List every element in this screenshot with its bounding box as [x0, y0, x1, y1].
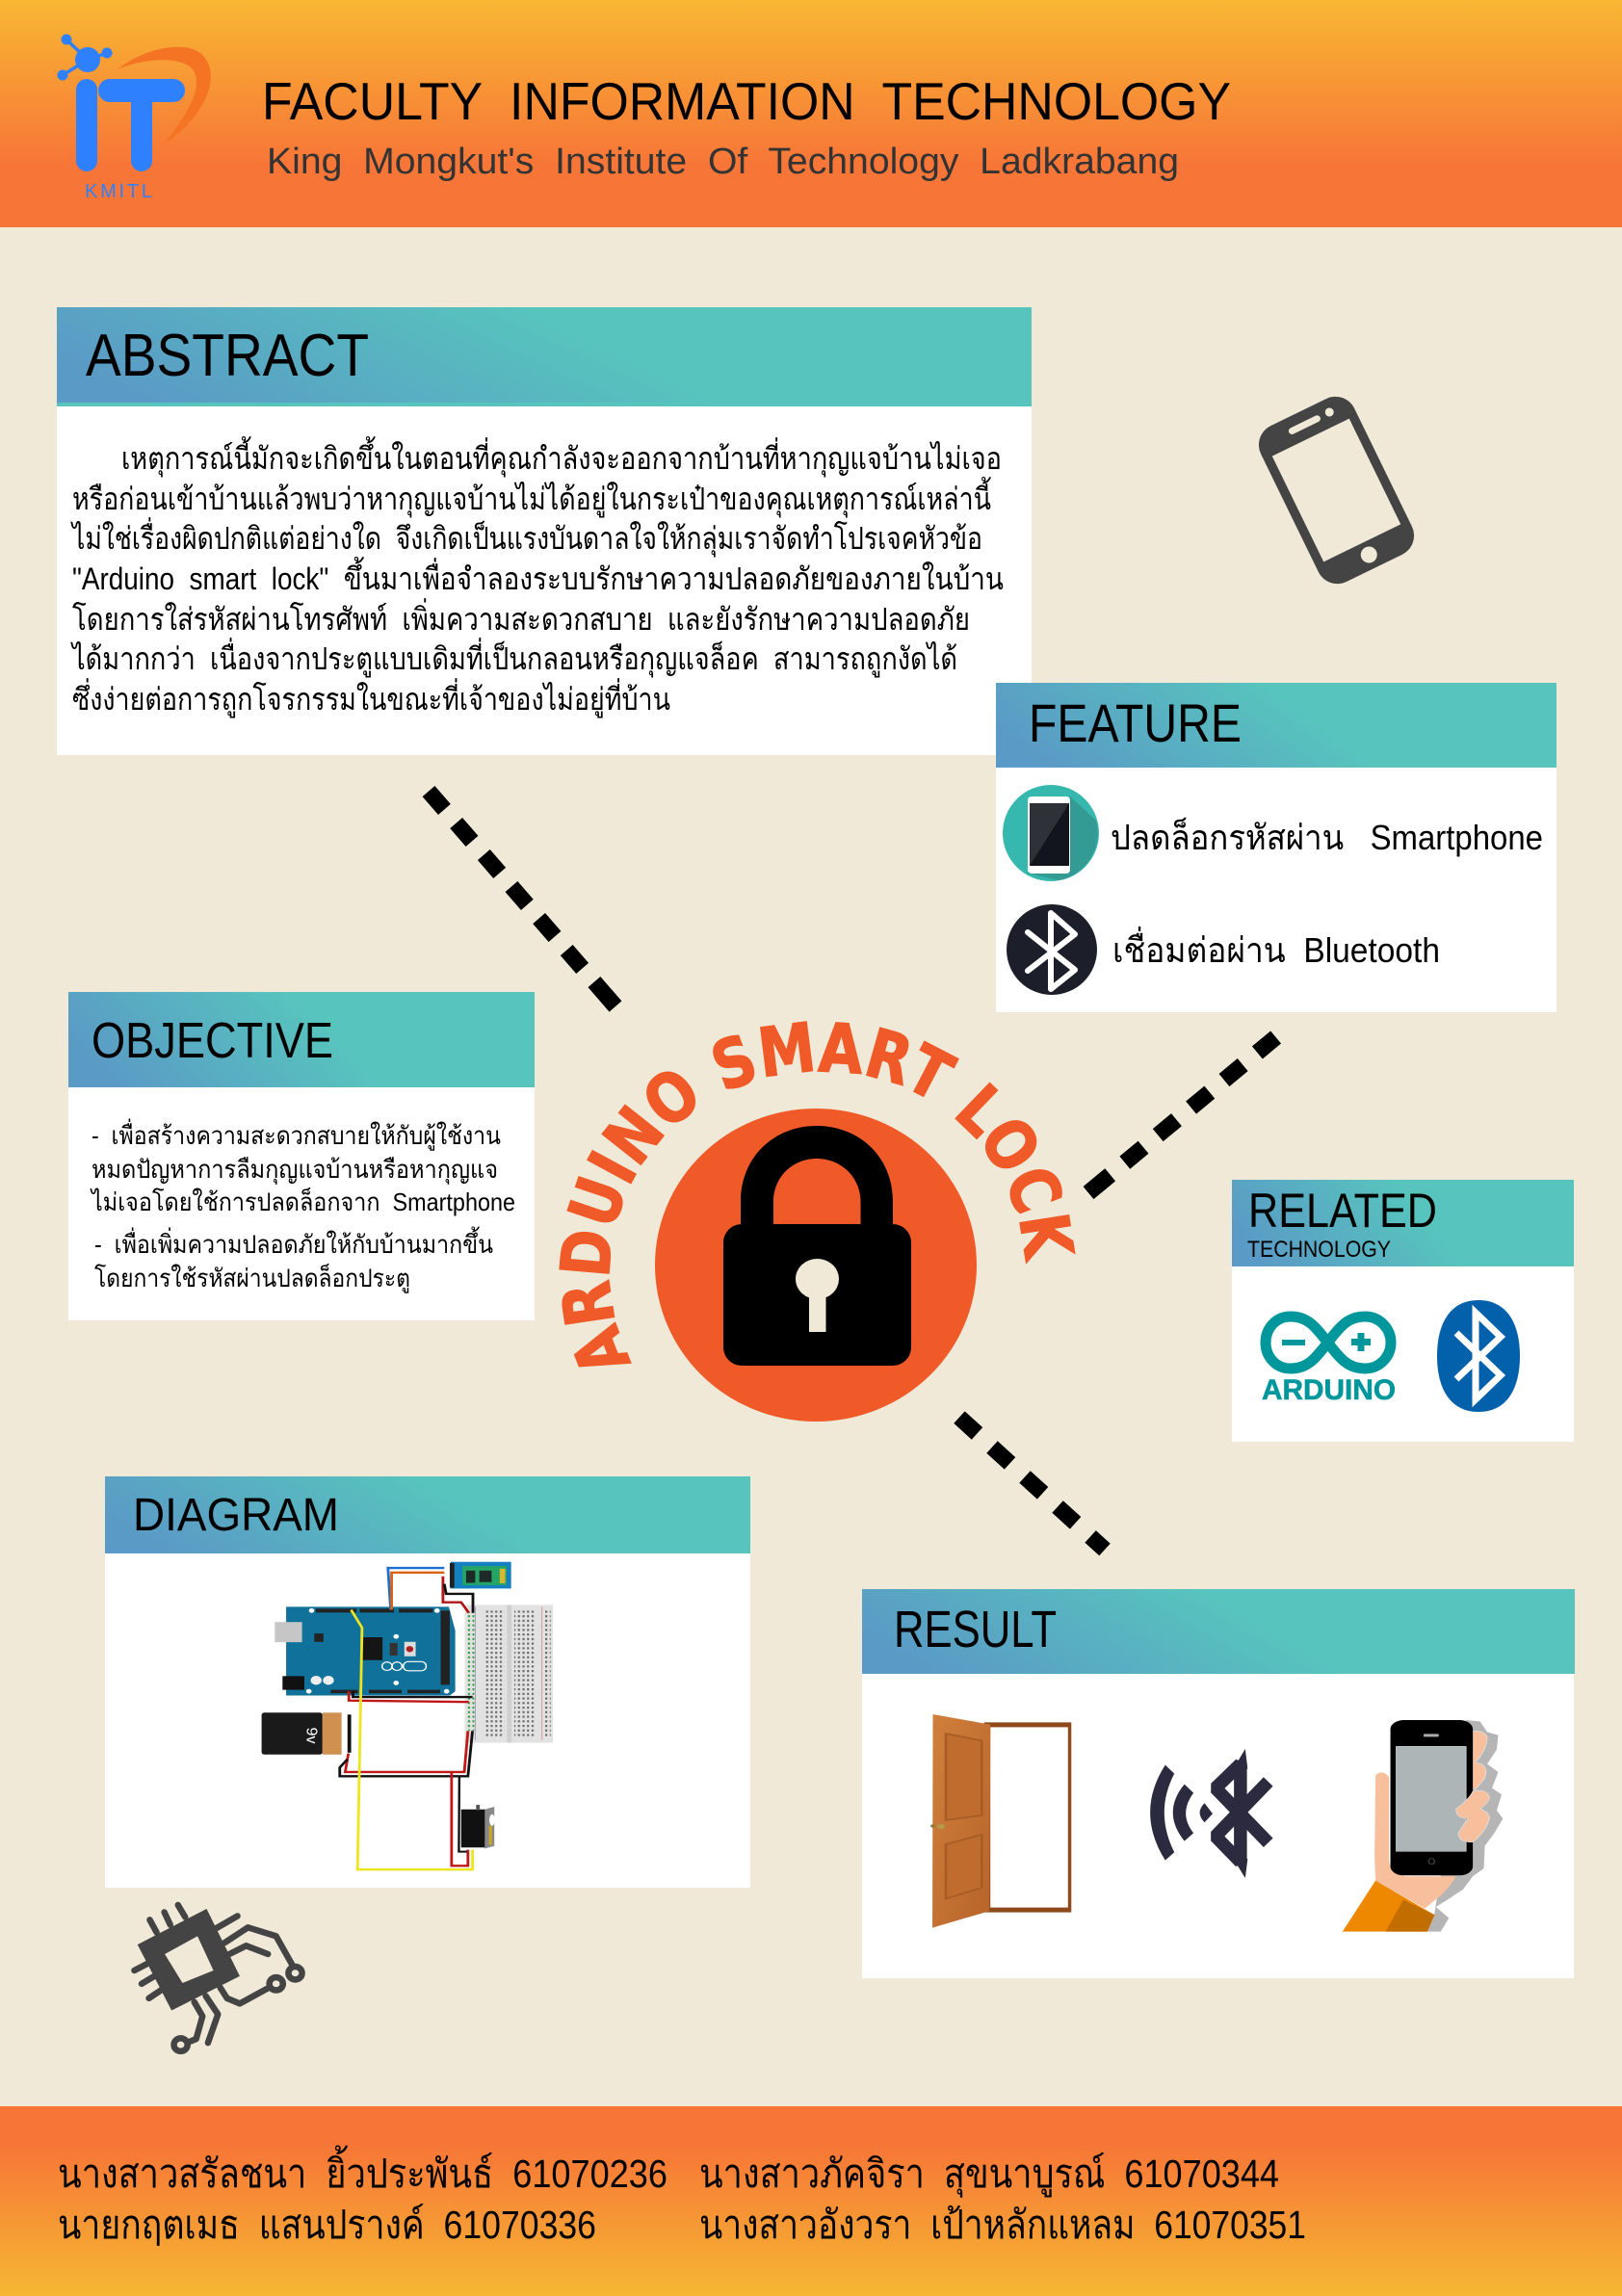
- heading: related: RELATED: [1248, 1184, 1437, 1238]
- objective text: โดยการใช้รหัสผ่านปลดล็อกประตู: [94, 1263, 410, 1293]
- heading: diagram: DIAGRAM: [133, 1490, 339, 1541]
- dashed connector: to feature: [1088, 1037, 1276, 1193]
- heading: result: RESULT: [894, 1601, 1057, 1658]
- student names: นายกฤตเมธ แสนปรางค์ 61070336: [58, 2203, 596, 2247]
- icon: arduino logo: [1262, 1317, 1396, 1406]
- student names: [58, 2145, 1306, 2247]
- logo: IT KMITL: [58, 35, 211, 202]
- subheading: technology: TECHNOLOGY: [1247, 1237, 1391, 1263]
- dashed connector: to abstract: [429, 792, 615, 1006]
- objective text: หมดปัญหาการลืมกุญแจบ้านหรือหากุญแจ: [92, 1155, 498, 1185]
- icon: padlock: [723, 1126, 911, 1366]
- objective text: - เพื่อสร้างความสะดวกสบายให้กับผู้ใช้งาน: [92, 1118, 501, 1151]
- panel: feature: [996, 683, 1557, 1012]
- arduino mega board: [275, 1606, 456, 1696]
- abstract text: "Arduino smart lock" ขึ้นมาเพื่อจำลองระบบรักษาความปลอดภัยของภายในบ้าน: [72, 557, 1004, 596]
- circle: [655, 1109, 977, 1422]
- abstract text: หรือก่อนเข้าบ้านแล้วพบว่าหากุญแจบ้านไม่ได้อยู่ในกระเป๋าของคุณเหตุการณ์เหล่านี้: [72, 477, 992, 518]
- title: FACULTY INFORMATION TECHNOLOGY: [262, 71, 1231, 131]
- header band: [0, 0, 1622, 227]
- curved title: ARDUINO SMART LOCK: [559, 1021, 1076, 1368]
- student names: นางสาวสรัลชนา ยิ้วประพันธ์ 61070236: [58, 2145, 667, 2196]
- breadboard: [465, 1605, 553, 1743]
- heading: objective: OBJECTIVE: [92, 1013, 333, 1069]
- wires: [340, 1568, 473, 1869]
- central emblem: arduino smart lock: [559, 1021, 1076, 1422]
- objective text: - เพื่อเพิ่มความปลอดภัยให้กับบ้านมากขึ้น: [94, 1226, 493, 1259]
- icon: arduino logo: ARDUINO: [1262, 1374, 1396, 1406]
- abstract text: ไม่ใช่เรื่องผิดปกติแต่อย่างใด จึงเกิดเป็นแรงบันดาลใจให้กลุ่มเราจัดทำโปรเจคหัวข้อ: [70, 517, 982, 558]
- icon: open door: [930, 1714, 1071, 1928]
- footer band: [0, 2106, 1622, 2296]
- subtitle: King Mongkut's Institute Of Technology Ladkrabang: [267, 142, 1179, 182]
- panel: diagram: [105, 1476, 750, 1888]
- circuit diagram: [262, 1562, 553, 1869]
- heading: feature: FEATURE: [1029, 692, 1242, 753]
- abstract text: ซึ่งง่ายต่อการถูกโจรกรรมในขณะที่เจ้าของไม่อยู่ที่บ้าน: [72, 678, 670, 718]
- icon: circuit chip: [134, 1905, 302, 2051]
- logo: IT KMITL: KMITL: [85, 181, 152, 202]
- abstract text: [69, 436, 1004, 718]
- 9v battery: [262, 1712, 352, 1755]
- panel: result: [862, 1589, 1575, 1978]
- 9v battery: 9v: [302, 1728, 319, 1744]
- abstract text: ได้มากกว่า เนื่องจากประตูแบบเดิมที่เป็นกลอนหรือกุญแจล็อค สามารถถูกงัดได้: [69, 638, 957, 678]
- objective text: ไม่เจอโดยใช้การปลดล็อกจาก Smartphone: [90, 1187, 515, 1216]
- icon: bluetooth signal: [1150, 1749, 1269, 1878]
- abstract text: เหตุการณ์นี้มักจะเกิดขึ้นในตอนที่คุณกำลังจะออกจากบ้านที่หากุญแจบ้านไม่เจอ: [121, 436, 1002, 478]
- panel: objective: [68, 992, 535, 1320]
- objective text: [90, 1118, 515, 1293]
- feature text: smartphone: ปลดล็อกรหัสผ่าน Smartphone: [1111, 816, 1543, 857]
- icon: smartphone: [1252, 389, 1421, 591]
- abstract text: โดยการใส่รหัสผ่านโทรศัพท์ เพิ่มความสะดวกสบาย และยังรักษาความปลอดภัย: [72, 598, 970, 637]
- bluetooth module: [450, 1562, 511, 1588]
- feature text: bluetooth: เชื่อมต่อผ่าน Bluetooth: [1112, 926, 1440, 970]
- icon: bluetooth logo: [1437, 1300, 1520, 1412]
- icon: bluetooth dark circle: [1007, 904, 1097, 995]
- icon: phone in teal circle: [1003, 785, 1099, 881]
- panel: related technology: [1232, 1180, 1574, 1442]
- heading: abstract: ABSTRACT: [86, 323, 369, 389]
- panel: abstract: [57, 307, 1032, 755]
- student names: นางสาวภัคจิรา สุขนาบูรณ์ 61070344: [699, 2152, 1279, 2198]
- dashed connector: to result: [959, 1418, 1105, 1550]
- icon: hand holding phone: [1343, 1720, 1503, 1932]
- student names: นางสาวอังวรา เป้าหลักแหลม 61070351: [699, 2203, 1306, 2247]
- servo motor: [461, 1805, 495, 1848]
